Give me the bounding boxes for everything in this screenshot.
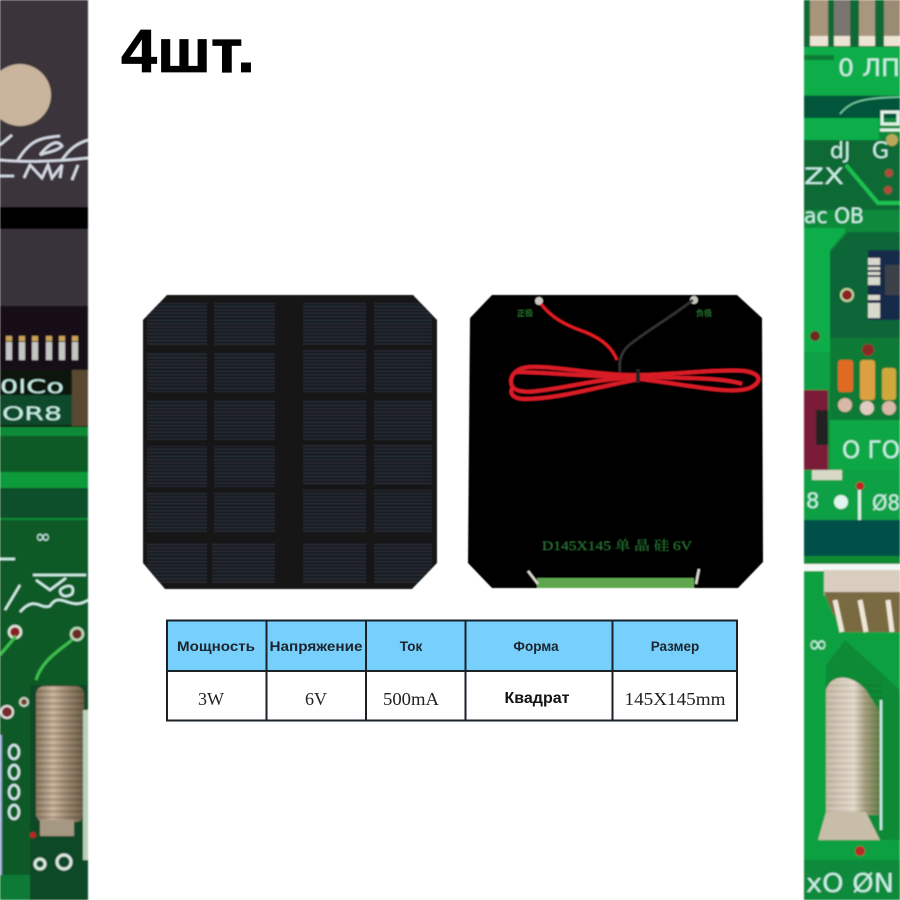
values: [198, 689, 726, 709]
right circuit board strip: [804, 0, 900, 900]
header labels: Размер: [651, 639, 699, 654]
solar cells grid: [147, 303, 432, 583]
solar panel front: [143, 295, 437, 589]
right circuit board strip: ZX: [804, 165, 844, 190]
header labels: Ток: [400, 639, 422, 654]
header labels: Напряжение: [270, 639, 363, 654]
red wire: [541, 304, 617, 360]
terminal labels: 正极: [517, 308, 533, 318]
values: Квадрат: [505, 690, 570, 707]
values: 500mA: [383, 689, 439, 709]
right circuit board strip: 8: [806, 489, 819, 513]
specification table: [167, 620, 737, 721]
table header background: [167, 621, 737, 671]
right circuit board strip: dJ: [830, 139, 850, 164]
header labels: Мощность: [177, 639, 255, 654]
left circuit board strip: [0, 0, 88, 900]
left circuit board strip: OR8: [2, 403, 62, 425]
negative label: 负极: [696, 308, 712, 318]
right circuit board strip: 0 ЛП: [838, 54, 900, 82]
right circuit board strip: G: [872, 139, 889, 164]
right circuit board strip: xO ØN: [806, 869, 894, 899]
title: 4шт.: [121, 17, 255, 85]
terminal pins: [528, 569, 699, 584]
header labels: Форма: [513, 639, 559, 654]
green terminal strip: [537, 578, 694, 588]
header labels: [177, 639, 699, 654]
wire bundle: [511, 367, 758, 399]
panel marking: D145X145 单 晶 硅 6V: [542, 538, 693, 553]
solar panel back: [468, 295, 763, 588]
table grid: [167, 620, 737, 721]
right circuit board strip: ac OB: [804, 204, 864, 228]
left circuit board strip: ∞: [35, 526, 51, 548]
black wire: [620, 300, 693, 372]
values: 6V: [305, 689, 327, 709]
wire tie: [636, 369, 640, 383]
solder points: [535, 296, 698, 305]
values: 3W: [198, 689, 224, 709]
left circuit board strip: 0lCo: [0, 376, 64, 398]
values: 145X145mm: [624, 689, 726, 709]
right circuit board strip: ∞: [808, 630, 828, 658]
